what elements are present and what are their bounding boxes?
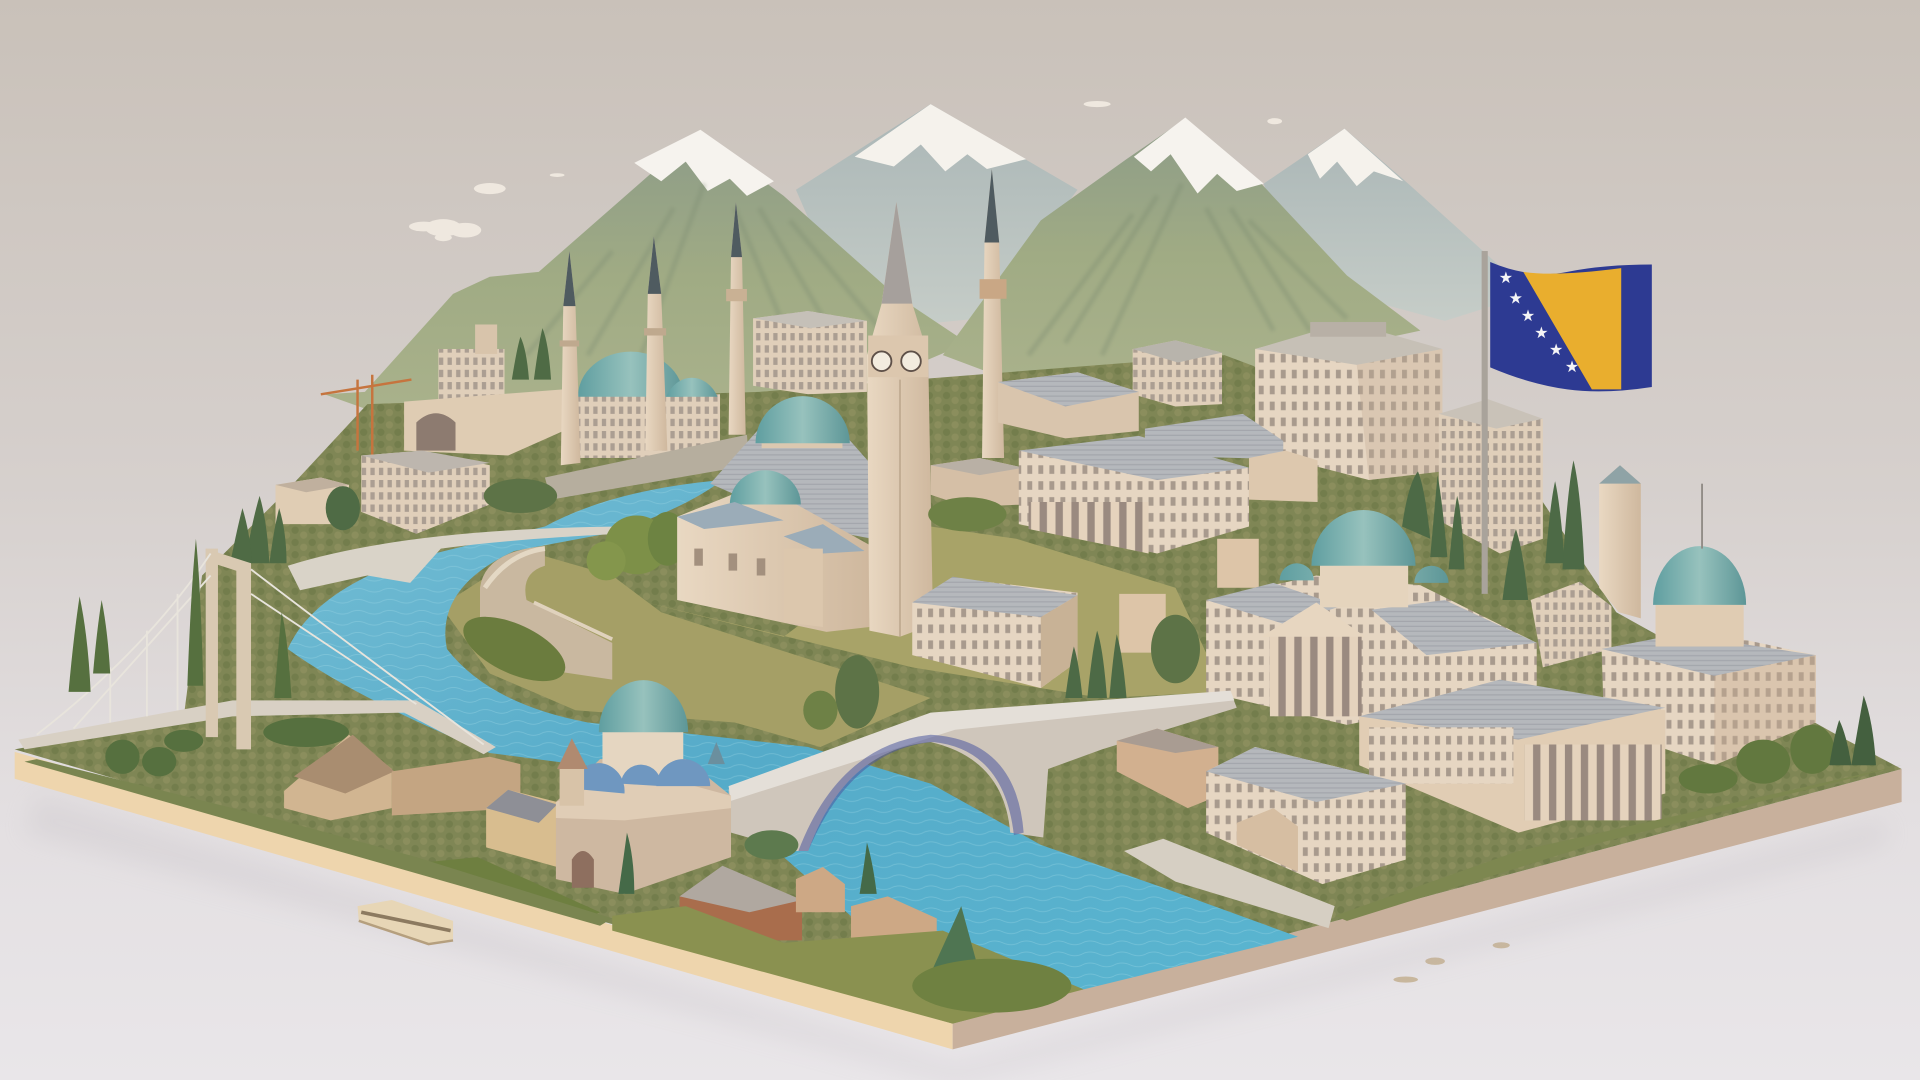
trees left back (230, 328, 687, 694)
small domes (1280, 563, 1449, 583)
upper river bridge (288, 527, 618, 590)
clock faces (872, 351, 921, 371)
mosque body (677, 484, 869, 632)
stars: ★ (1549, 340, 1563, 359)
flag cloth (1490, 262, 1652, 391)
small left house (276, 478, 349, 524)
mountains (324, 104, 1531, 422)
barrel roof hall (1145, 414, 1283, 459)
base side faces (15, 752, 1902, 1049)
tall right tower block (1439, 399, 1543, 553)
side dome (730, 470, 801, 504)
main body (1206, 576, 1537, 725)
clock tower (867, 202, 933, 637)
back mountain left-centre (796, 104, 1078, 331)
low annex (392, 757, 520, 816)
small pebbles on the table (1393, 942, 1510, 983)
cypress trees centre (803, 460, 1584, 730)
right domed museum (1602, 484, 1816, 765)
embankment wall (545, 435, 749, 500)
stars: ★ (1565, 357, 1579, 376)
front mountain left (324, 130, 967, 422)
grand domed parliament (1206, 510, 1611, 725)
main dome (756, 396, 850, 448)
boat (358, 900, 453, 944)
minaret 1 (560, 251, 580, 465)
riverside hall (1117, 729, 1218, 808)
towers (206, 549, 251, 749)
front arcaded block (1206, 747, 1406, 884)
front greenery (24, 759, 1902, 1024)
rear wing (1531, 582, 1611, 667)
hilltop palace left (404, 324, 563, 456)
cypress trees far left (69, 539, 349, 776)
clouds and birds (409, 101, 1282, 241)
side roofs (677, 502, 864, 553)
flag pole (1482, 251, 1488, 594)
portico (1261, 602, 1365, 716)
main roof (710, 429, 872, 539)
back mountain right (1264, 129, 1531, 321)
yellow triangle (1523, 268, 1621, 389)
annex (1249, 451, 1318, 502)
small tan block (1133, 340, 1222, 407)
small houses (796, 867, 937, 943)
tall block behind (753, 311, 867, 394)
stars: ★ (1499, 268, 1513, 287)
small hill buildings (1119, 539, 1259, 653)
front mountain right (943, 118, 1420, 392)
central mosque (677, 396, 872, 632)
suspension bridge (18, 549, 496, 754)
stars: ★ (1534, 323, 1549, 342)
front left block on the hill (912, 577, 1078, 688)
stone cottage (284, 735, 394, 820)
low left block (361, 451, 490, 534)
river (288, 480, 1298, 989)
cables (37, 553, 484, 744)
deck (18, 700, 496, 754)
stars: ★ (1509, 289, 1523, 308)
table shadow of diorama (24, 796, 1886, 1080)
retaining stone wall (480, 546, 612, 680)
slender right tower (1599, 465, 1641, 618)
right back buildings (931, 322, 1543, 553)
mid roofed hall (998, 372, 1139, 438)
stars (1499, 268, 1579, 376)
colonnade hall (1359, 680, 1665, 833)
front church (556, 680, 731, 894)
stone arch bridge (729, 691, 1237, 851)
riverside promenade (1124, 839, 1335, 928)
red-brown house (680, 866, 802, 940)
yellow house (486, 790, 557, 867)
tall office block (1255, 322, 1442, 480)
minaret 2 (644, 236, 667, 451)
flag of Bosnia and Herzegovina (1482, 251, 1652, 594)
far-back left buildings (276, 311, 867, 534)
right trees (1679, 696, 1876, 793)
low side block (931, 458, 1024, 507)
green domed hall (576, 352, 720, 458)
ministry building (1019, 436, 1249, 553)
roof (1206, 583, 1537, 655)
stars: ★ (1521, 306, 1535, 325)
hills lighter ground (637, 527, 1224, 698)
minaret 3 (726, 202, 747, 435)
drum and dome (1311, 510, 1416, 607)
minarets (560, 169, 1007, 465)
minaret 4 (980, 169, 1007, 458)
ground surface (15, 355, 1902, 1024)
construction crane (321, 375, 411, 456)
front-left village (284, 735, 937, 943)
